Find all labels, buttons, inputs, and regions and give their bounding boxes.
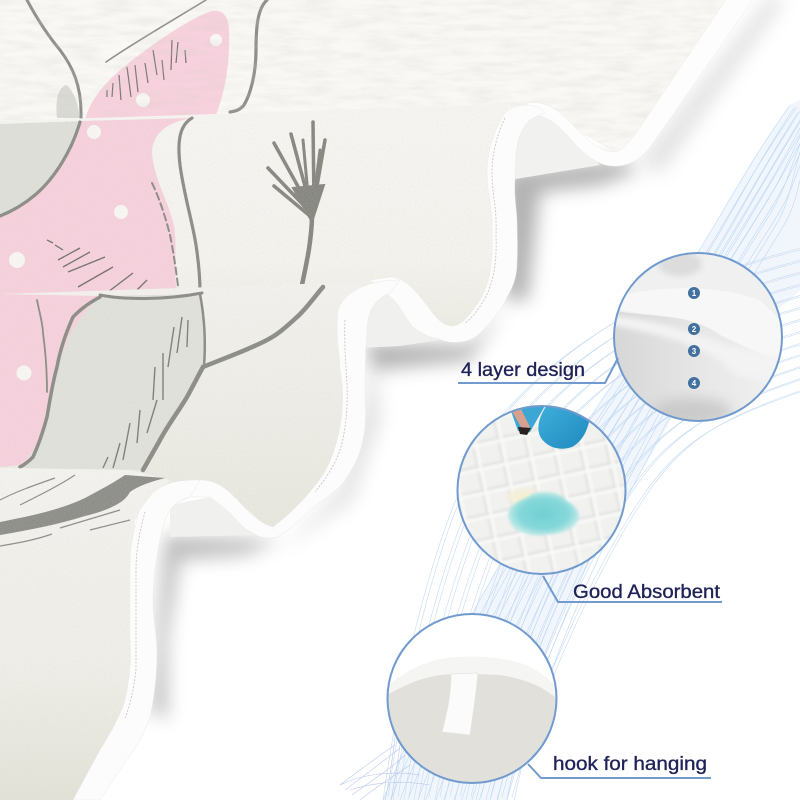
white binding of third fold: [170, 280, 400, 538]
label: Good Absorbent: [573, 581, 721, 603]
white binding of bottom fold: [73, 480, 200, 800]
mesh: dense diagonal ribbon: [383, 105, 800, 800]
numbered layer badges: 3: [692, 347, 697, 356]
petal hatching: [47, 240, 147, 292]
thin feather lines: [0, 475, 130, 546]
grey feathered leaf stroke: [0, 475, 165, 535]
icon: dandelion sprig: [268, 122, 325, 285]
mesh: fan lines to the right edge: [383, 250, 800, 800]
panel: second blanket fold: [0, 104, 545, 348]
underside of top fold: [500, 112, 600, 180]
soft blanket shadows: [150, 0, 785, 720]
third fold fabric and artwork: [0, 283, 385, 532]
callout: 4 layer design: [458, 250, 790, 430]
white binding of second fold: [370, 105, 545, 342]
icon: dropper tip: [512, 407, 544, 432]
icon: hanging tab: [442, 673, 478, 735]
underside of third fold: [170, 497, 258, 537]
stain halo: [507, 489, 543, 505]
top fold fabric and artwork: [0, 0, 745, 158]
mesh: offset copy of fan lines: [388, 247, 800, 797]
grey leaf: [20, 294, 205, 470]
icon: water drop: [538, 407, 589, 449]
binding stitch line: [465, 118, 505, 323]
blue mesh wave background: [340, 100, 800, 800]
numbered layer badges: [688, 287, 700, 389]
white binding of top fold: [527, 0, 754, 166]
panel: bottom blanket fold: [0, 468, 200, 800]
outline strokes: [20, 287, 323, 470]
cream fabric: [388, 674, 556, 782]
panel: third blanket fold: [0, 280, 400, 538]
leader line: [458, 358, 618, 383]
pink petal: [0, 294, 100, 467]
detail circle: water drop on crepe: [456, 405, 626, 575]
petal polka dots: [136, 34, 222, 107]
petal polka dots: [9, 125, 128, 268]
label: hook for hanging: [553, 753, 707, 775]
label: 4 layer design: [461, 359, 585, 381]
grey leaf piece: [56, 85, 80, 118]
mesh: tinted ribbon: [383, 100, 800, 800]
mesh: offset copy of diagonal ribbon: [390, 107, 800, 800]
grey leaf section: [0, 121, 82, 217]
second fold fabric and artwork: [0, 104, 510, 335]
callout: Good Absorbent: [450, 400, 722, 603]
binding stitch line: [125, 512, 145, 718]
white hem band: [389, 656, 556, 697]
petal hatching: [107, 40, 186, 100]
petal polka dot: [16, 366, 32, 380]
pink petal: [85, 11, 229, 120]
numbered layer badges: 1: [692, 289, 697, 298]
detail circle: fabric layers: [613, 252, 783, 422]
numbered layer badges: 2: [692, 325, 697, 334]
callout: hook for hanging: [385, 612, 711, 790]
outline strokes: [27, 0, 267, 118]
mesh: small crossing fan at lower left: [340, 738, 430, 800]
icon: absorbed water stain: [508, 492, 579, 535]
leader line: [543, 576, 722, 602]
outline strokes: [0, 118, 200, 292]
panel: top blanket fold: [0, 0, 754, 180]
binding stitch line: [315, 320, 347, 492]
bottom fold fabric and artwork: [0, 468, 170, 800]
leader line: [528, 764, 711, 778]
underside of second fold: [360, 285, 440, 348]
pink petal: [0, 118, 192, 296]
leaf hatching: [103, 317, 188, 468]
numbered layer badges: 4: [692, 379, 697, 388]
detail circle: hanging loop: [385, 612, 560, 790]
